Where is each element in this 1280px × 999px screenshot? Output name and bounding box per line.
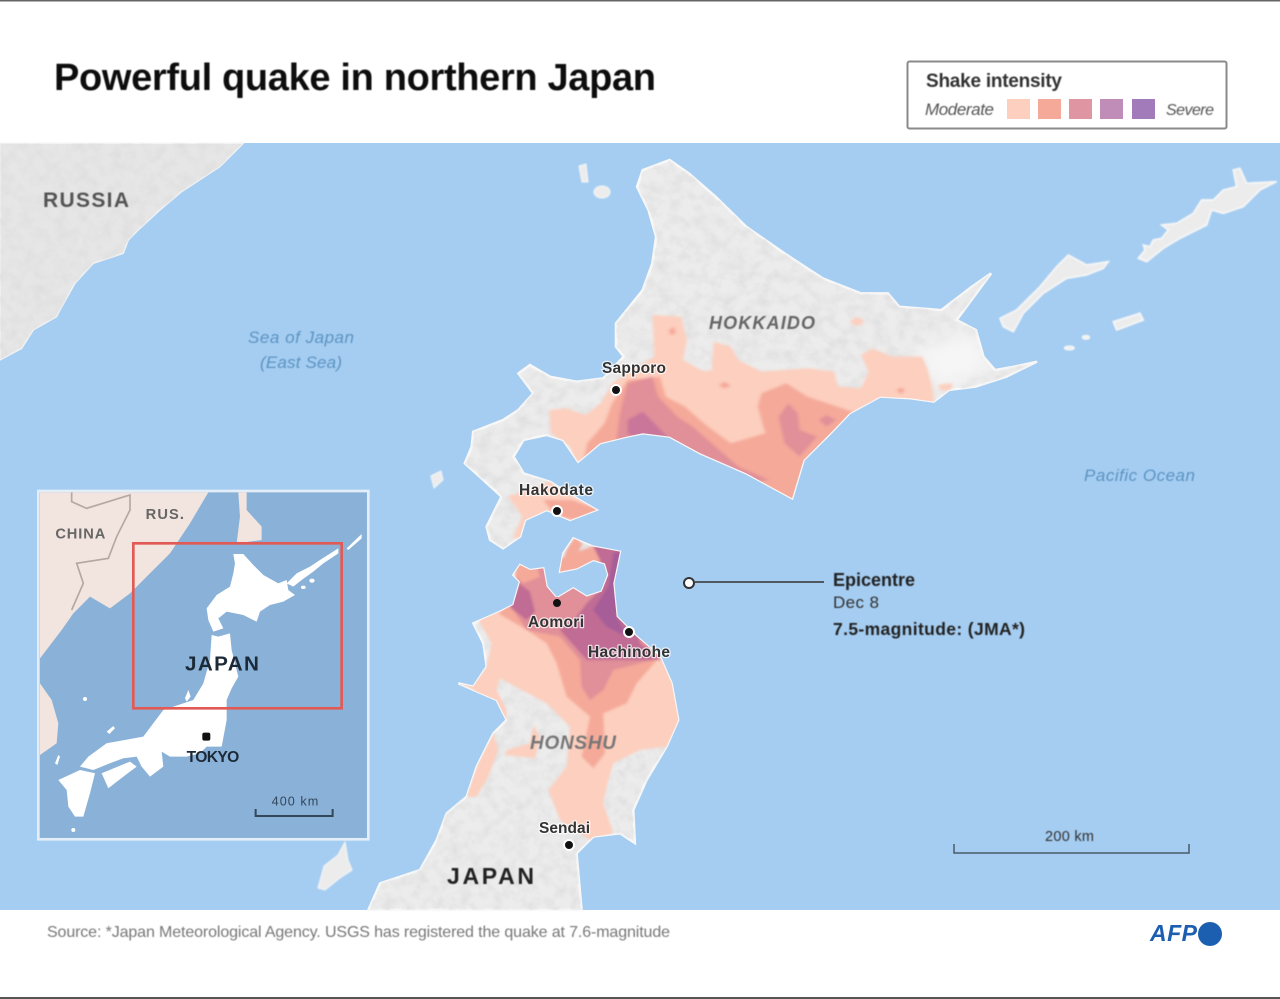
legend: shake intensity: Moderate	[925, 100, 994, 119]
label: RUSSIA: RUSSIA	[43, 189, 129, 212]
land: Honshu with shake zones	[368, 533, 683, 910]
city: Hachinohe: Hachinohe	[588, 644, 670, 661]
small islands and Kurils	[318, 164, 1277, 890]
label: Sea of Japan: Sea of Japan	[248, 328, 354, 347]
label: HOKKAIDO: HOKKAIDO	[709, 313, 815, 333]
page edge lines	[0, 0, 1280, 2]
inset scale bar: 400 km: 400 km	[272, 795, 318, 809]
city: Sendai: Sendai	[539, 820, 590, 837]
legend: shake intensity: Severe	[1166, 102, 1214, 119]
inset land: China and Russia	[40, 492, 262, 755]
map: northern Japan	[0, 143, 1280, 910]
inset label: JAPAN: JAPAN	[185, 653, 259, 676]
epicentre marker and callout: Dec 8	[833, 593, 879, 612]
source note: Source: *Japan Meteorological Agency. USGS has registered the quake at 7.6-magnitude	[47, 924, 670, 941]
inset city: Tokyo	[187, 733, 239, 766]
city: Sendai	[539, 820, 590, 850]
epicentre marker and callout: Epicentre	[833, 570, 915, 590]
label: Pacific Ocean: Pacific Ocean	[1084, 466, 1195, 485]
inset land: Japan	[55, 534, 362, 832]
city: Sapporo	[602, 360, 666, 395]
label: JAPAN: JAPAN	[447, 863, 534, 889]
inset extent rectangle	[133, 543, 342, 708]
inset scale bar: 400 km	[256, 795, 333, 816]
inset locator map	[38, 491, 368, 839]
epicentre marker and callout	[684, 570, 1025, 639]
land: Russia	[0, 143, 243, 360]
city: Hachinohe	[588, 627, 670, 661]
scale bar: 200 km	[954, 829, 1189, 853]
sea	[0, 143, 1280, 910]
inset sea	[38, 491, 368, 839]
city: Sapporo: Sapporo	[602, 360, 666, 377]
title: Powerful quake in northern Japan	[54, 57, 656, 99]
inset city: Tokyo: TOKYO	[187, 749, 239, 766]
city: Hakodate: Hakodate	[519, 482, 593, 499]
label: East Sea: (East Sea)	[260, 353, 342, 372]
inset label: RUS.: RUS.	[146, 507, 184, 523]
label: HONSHU: HONSHU	[530, 733, 617, 754]
legend: shake intensity: Shake intensity	[926, 71, 1062, 92]
scale bar: 200 km: 200 km	[1045, 829, 1094, 845]
land: Hokkaido with shake zones	[465, 160, 1037, 548]
AFP logo	[1149, 920, 1222, 946]
epicentre marker and callout: 7.5-magnitude: (JMA*)	[833, 619, 1025, 639]
city: Hakodate	[519, 482, 593, 516]
legend: shake intensity	[908, 62, 1226, 128]
city: Aomori: Aomori	[528, 614, 584, 631]
city: Aomori	[528, 598, 584, 631]
inset label: CHINA: CHINA	[55, 527, 106, 543]
AFP logo: AFP	[1149, 920, 1198, 946]
